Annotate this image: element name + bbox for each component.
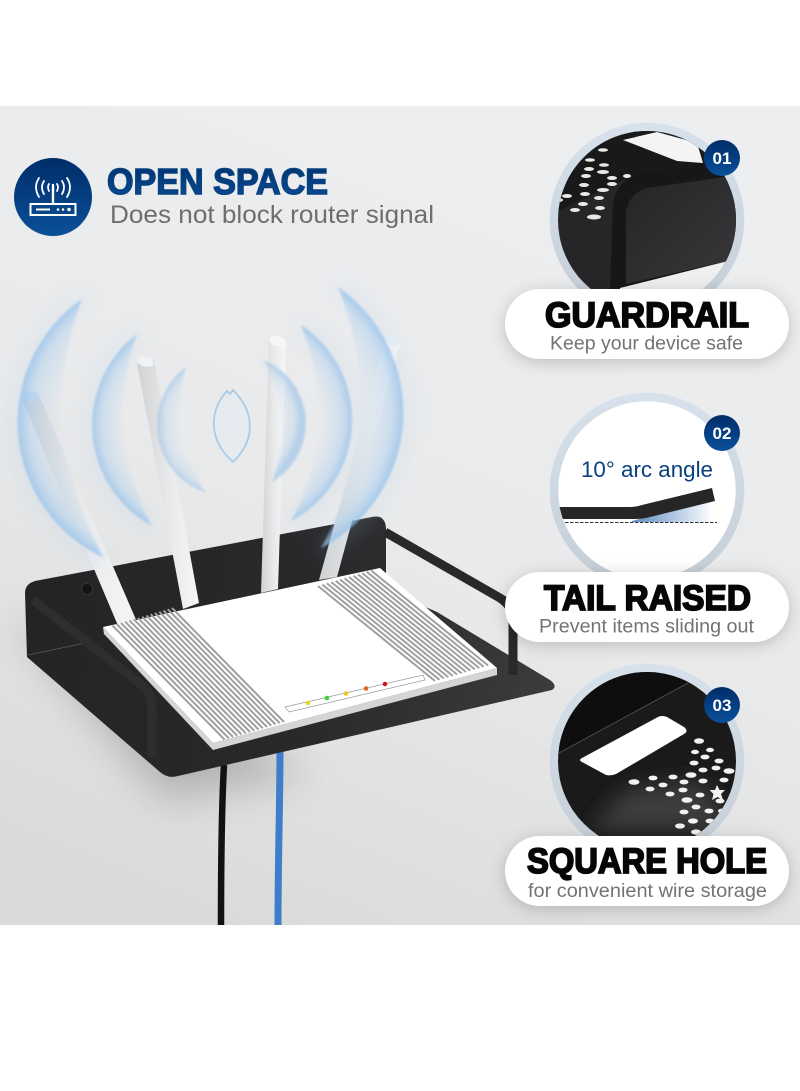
badge 03: 03 [713, 696, 731, 715]
dashed reference line [565, 522, 717, 523]
badge 03 [704, 687, 740, 723]
detail 01: guardrail [550, 122, 744, 289]
cables [221, 750, 280, 925]
shelf screw [82, 584, 92, 594]
heading: open space: OPEN SPACE [107, 161, 328, 202]
pill: tail raised: Prevent items sliding out [539, 616, 755, 638]
shelf guardrails [33, 532, 513, 757]
signal waves [18, 287, 403, 558]
tail bar [555, 488, 715, 519]
pill: square hole: for convenient wire storage [528, 881, 767, 902]
pill: tail raised [505, 572, 789, 642]
badge 02: 02 [713, 424, 731, 443]
detail 03: square hole [554, 668, 740, 854]
wire slot [580, 716, 686, 775]
shelf shadow on wall [12, 620, 310, 800]
icon: router badge [14, 158, 92, 236]
badge 02 [704, 415, 740, 451]
pill: square hole [505, 836, 789, 906]
badge 01: 01 [713, 149, 731, 168]
background panel [0, 106, 800, 925]
shelf body [25, 516, 555, 777]
badge 01 [704, 140, 740, 176]
pill: guardrail: Keep your device safe [550, 334, 743, 354]
pill: guardrail: GUARDRAIL [545, 296, 749, 335]
arc angle label: 10° arc angle [581, 457, 713, 482]
antennas [21, 332, 402, 628]
shelf crease [28, 643, 85, 655]
arc gradient [632, 502, 709, 522]
detail 02: tail raised [554, 397, 740, 583]
router [103, 568, 497, 750]
router cooling ribs [112, 570, 488, 740]
router LED panel [285, 675, 425, 712]
subheading: does not block router signal: Does not block router signal [110, 201, 434, 229]
pill: square hole: SQUARE HOLE [527, 842, 767, 881]
pill: tail raised: TAIL RAISED [544, 579, 751, 618]
pill: guardrail [505, 289, 789, 359]
